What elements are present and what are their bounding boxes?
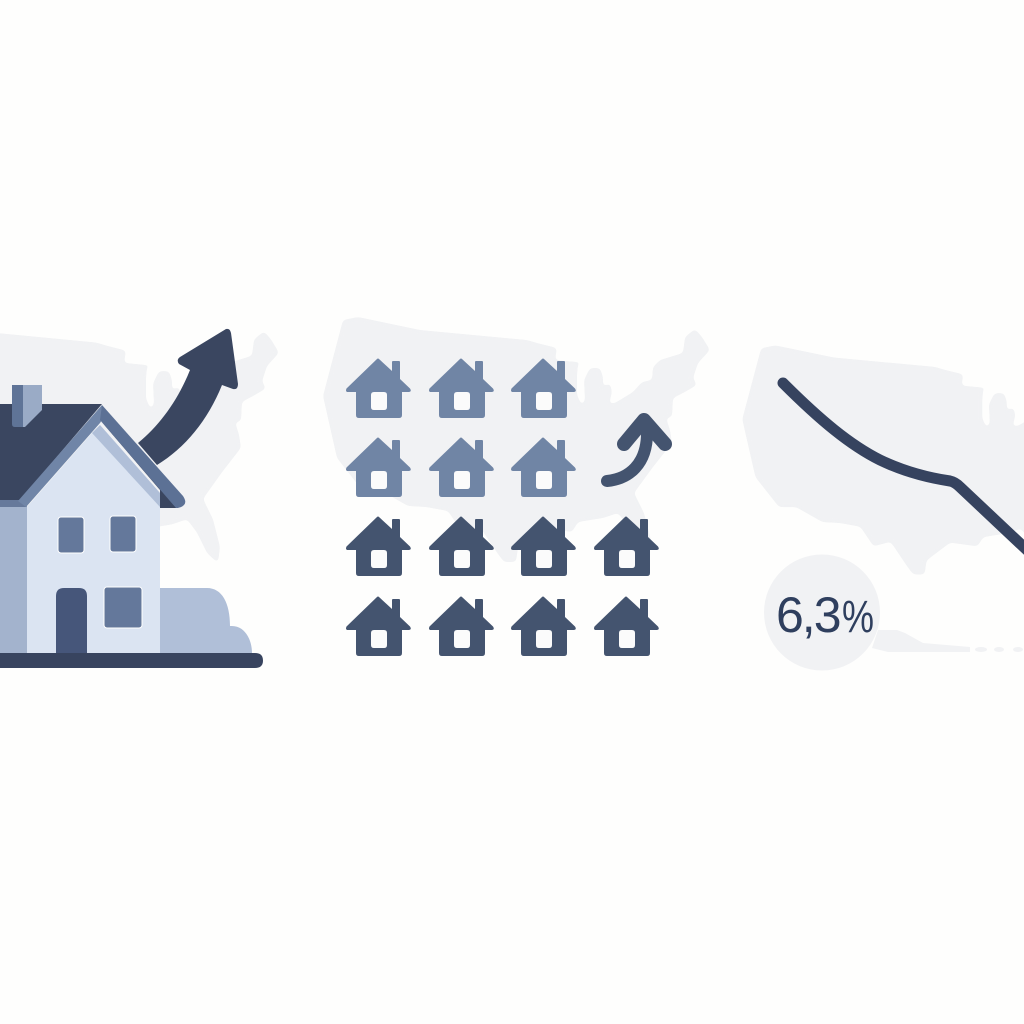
window: lower right	[104, 587, 142, 628]
door	[56, 588, 87, 653]
map: left	[0, 319, 279, 569]
panel: home prices rising	[0, 319, 279, 668]
value label: %	[842, 591, 874, 642]
house illustration	[0, 385, 185, 653]
window: upper left	[58, 517, 84, 553]
panel: rate decline	[742, 345, 1024, 670]
chimney	[12, 385, 42, 427]
window: upper right	[110, 516, 136, 552]
icons: house windows	[371, 392, 635, 648]
callout: rate bubble	[764, 554, 1023, 670]
value label: 6,3	[776, 587, 840, 643]
icons: dark houses	[346, 516, 659, 656]
map: middle	[323, 317, 710, 562]
ground	[0, 653, 263, 668]
line chart: falling trend	[783, 383, 1024, 551]
panel: housing supply	[323, 317, 710, 656]
icons: light houses	[346, 358, 576, 497]
map: right	[742, 345, 1024, 574]
arrow: big rising	[138, 329, 238, 465]
bush	[160, 588, 252, 653]
arrow: small rising	[607, 420, 665, 481]
